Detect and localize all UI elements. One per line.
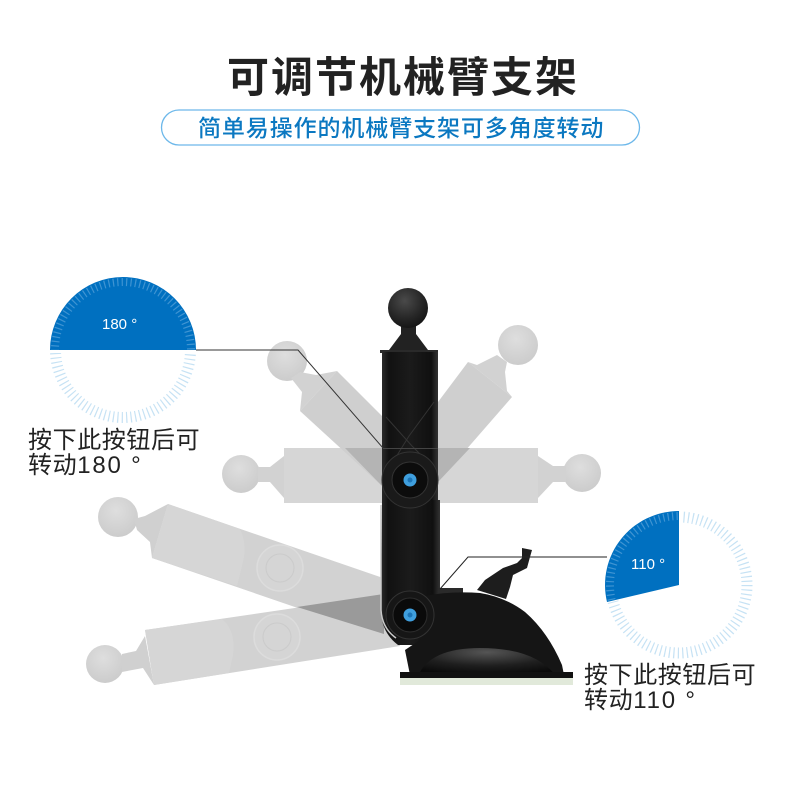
callout line: upper button	[196, 350, 383, 448]
main arm: lower segment	[381, 500, 440, 645]
dial: 180 degrees: 180 °	[102, 316, 137, 333]
ghost arm: upper positions	[222, 325, 601, 503]
caption: 110 degrees: 转动110 °	[584, 687, 697, 714]
dial: 110 degrees: 110 °	[631, 556, 665, 573]
suction base	[400, 548, 573, 685]
ghost arm: lower positions	[86, 497, 400, 685]
callout line: lower button	[440, 557, 607, 589]
upper pivot knob	[382, 452, 438, 508]
title: 可调节机械臂支架	[227, 54, 579, 101]
dial: 180 degrees	[50, 277, 196, 418]
caption: 110 degrees: 按下此按钮后可	[584, 662, 756, 689]
subtitle pill: 简单易操作的机械臂支架可多角度转动	[198, 115, 604, 141]
dial: 110 degrees	[605, 511, 748, 654]
main arm: upper segment with ball head	[380, 288, 438, 500]
lower pivot knob	[386, 591, 434, 639]
caption: 180 degrees: 按下此按钮后可	[28, 427, 200, 454]
caption: 180 degrees: 转动180 °	[28, 452, 143, 479]
subtitle pill	[162, 110, 640, 145]
